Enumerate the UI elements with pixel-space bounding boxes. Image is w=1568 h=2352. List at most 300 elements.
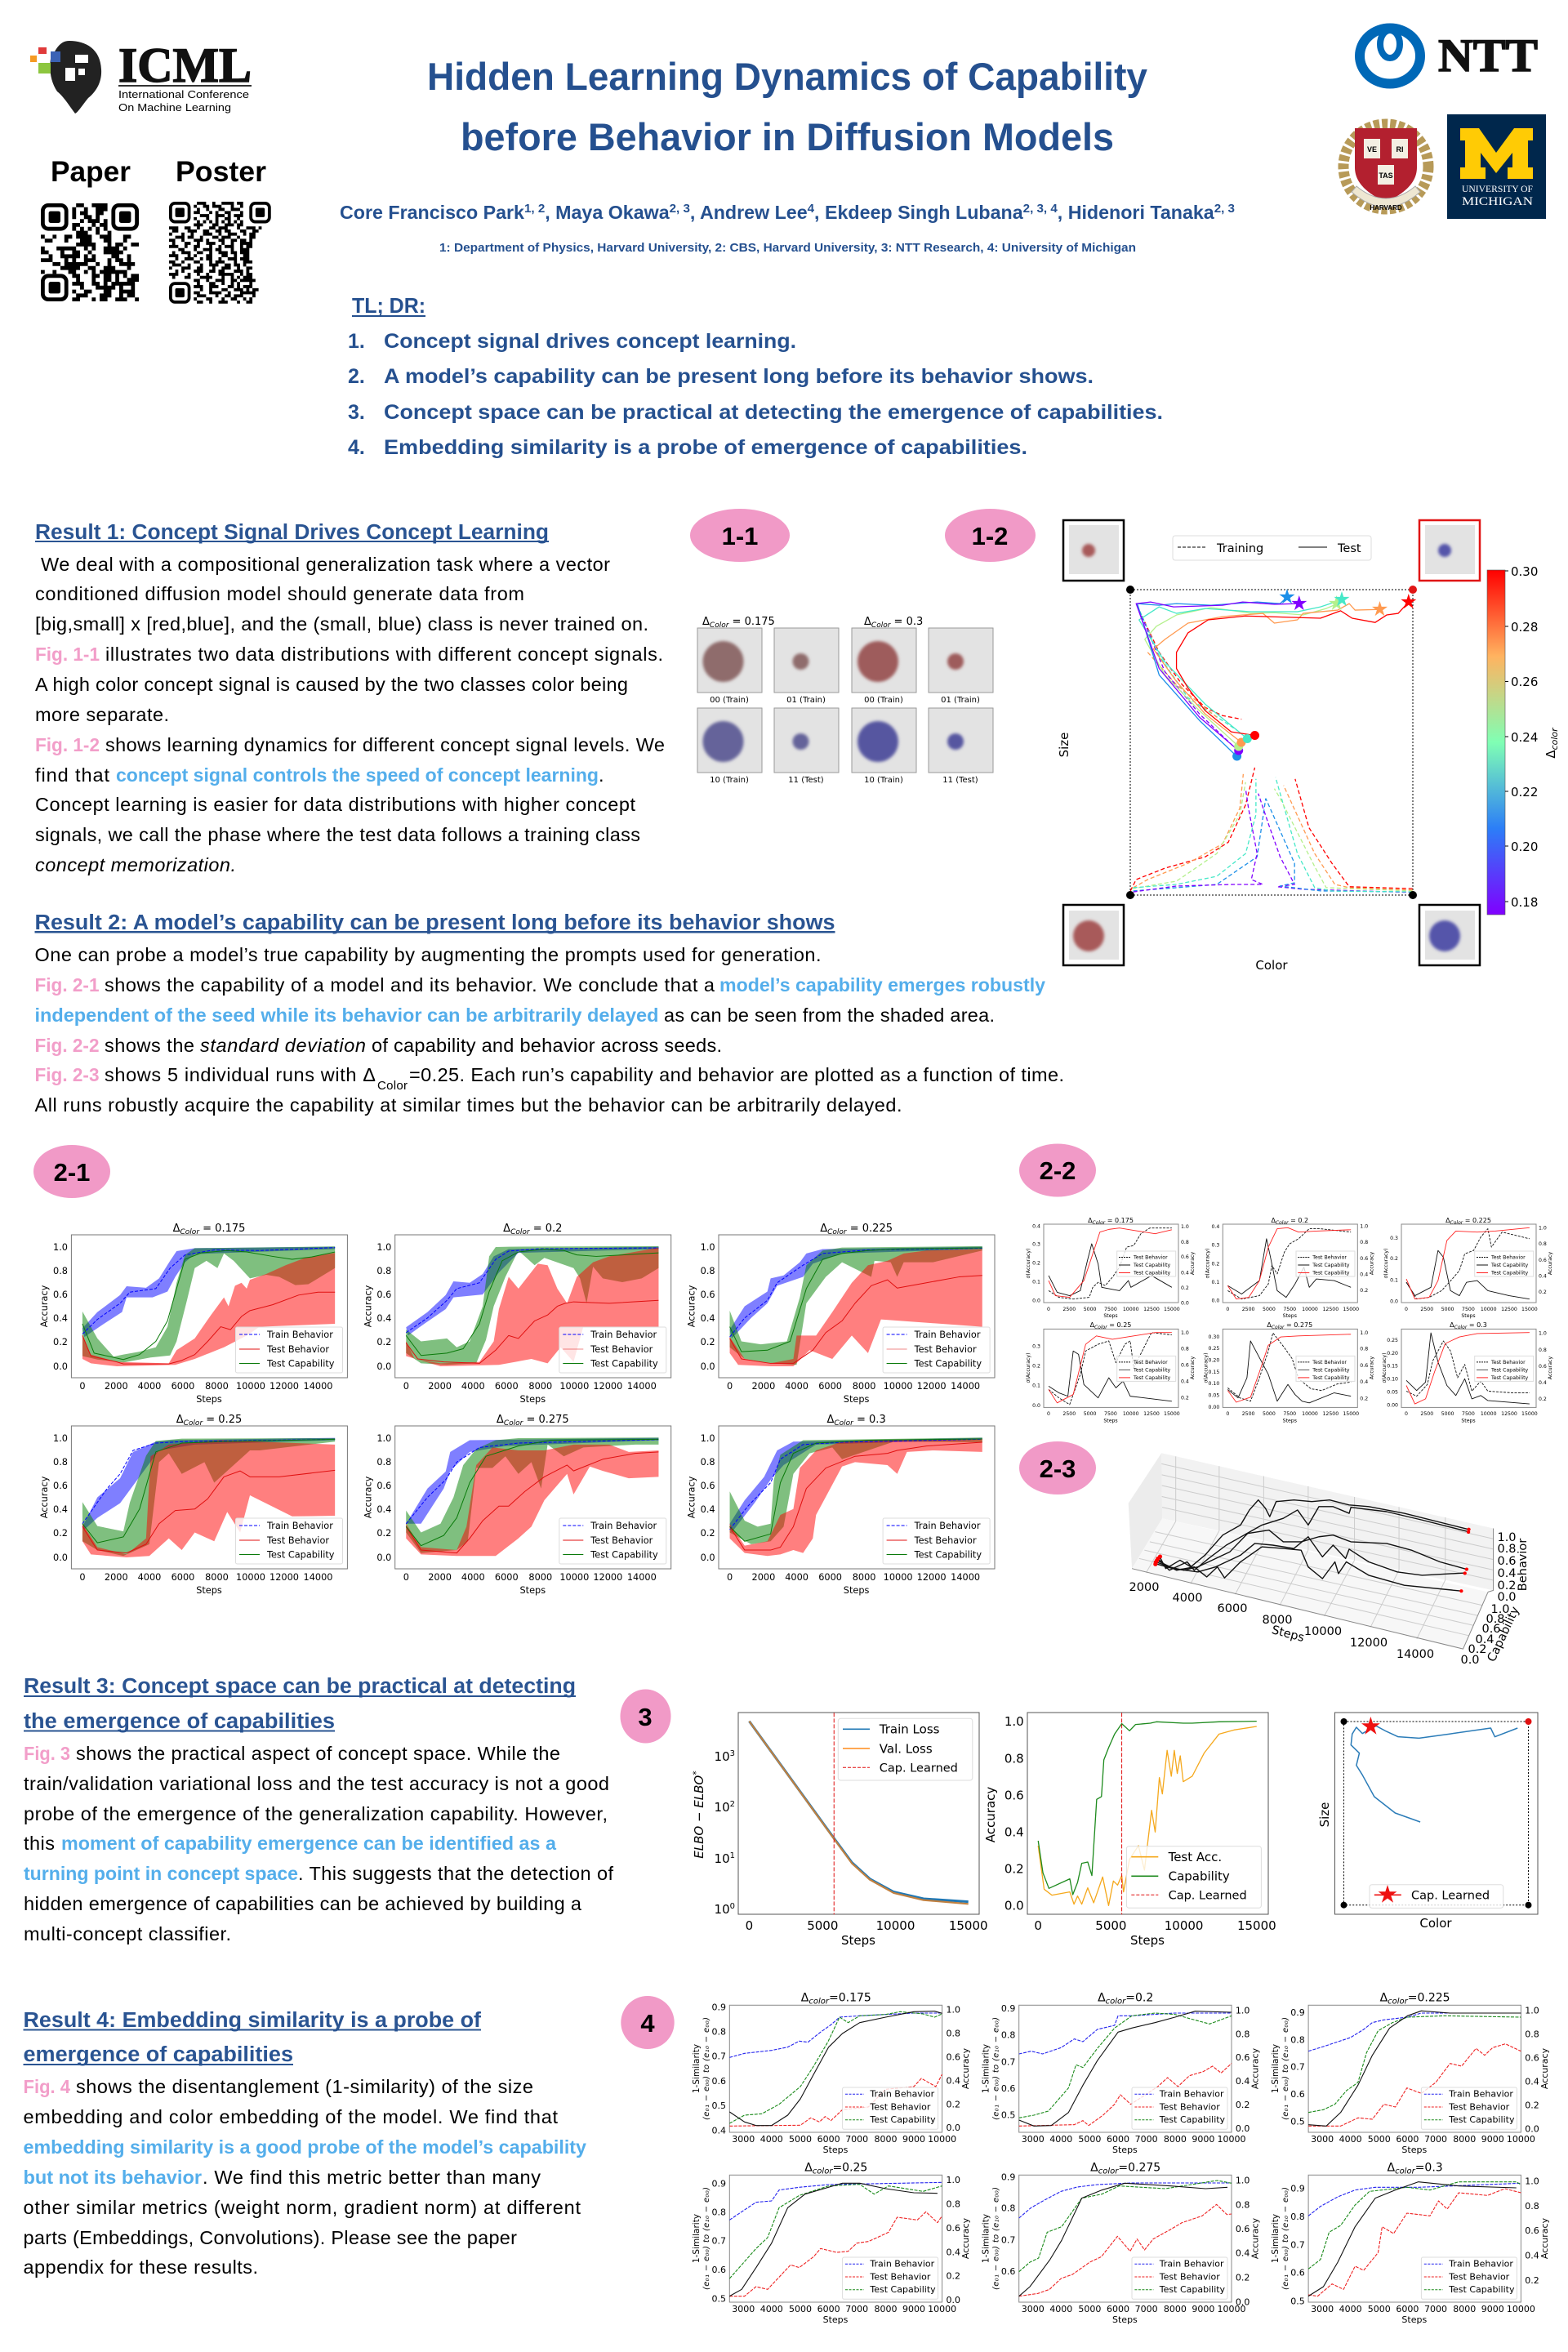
- figure 2-2: std chart 0.175: Δ: [1088, 1217, 1093, 1224]
- figure 3: accuracy chart: 0.4: [1004, 1824, 1024, 1839]
- figure 1-1: sample grids: 01 (Train): [941, 696, 980, 705]
- figure 2-1: accuracy chart 0.3: 0.0: [701, 1552, 715, 1563]
- figure 2-1: accuracy chart 0.175: [39, 1223, 347, 1405]
- figure 2-1: accuracy chart 0.2: 2000: [428, 1381, 452, 1392]
- figure 4: similarity chart 0.275: (e₀₁ − e₀₀) to (e₁₀ − e₀₀): [991, 2187, 1000, 2290]
- text: Result 3 body: [24, 1743, 613, 1944]
- figure 1-1: sample grids: Δ: [702, 616, 710, 628]
- figure 3: concept space chart: Size: [1317, 1802, 1332, 1827]
- figure 4: similarity chart 0.275: 0.4: [1236, 2248, 1250, 2259]
- colorbar: 0.26: [1511, 675, 1538, 689]
- figure 3: accuracy chart: Test Acc.: [1168, 1850, 1222, 1864]
- figure 2-1: accuracy chart 0.3: [687, 1414, 995, 1596]
- figure 4: similarity chart 0.275: 0.7: [1001, 2234, 1015, 2245]
- figure 2-1: accuracy chart 0.225: Color: [827, 1228, 848, 1236]
- figure 4: similarity chart 0.25: 0.6: [946, 2223, 960, 2234]
- figure 2-2: std chart 0.225: 15000: [1521, 1307, 1538, 1312]
- colorbar: color: [1549, 727, 1560, 750]
- figure 2-1: accuracy chart 0.175: 0.0: [53, 1361, 68, 1372]
- figure 4: similarity chart 0.175: Test Behavior: [869, 2101, 931, 2112]
- figure 4: similarity chart 0.3: 0.2: [1525, 2275, 1539, 2286]
- text: Result 1 body: A high color concept signal is caused by the two classes color being: [35, 674, 628, 695]
- figure 2-1: accuracy chart 0.3: = 0.3: [853, 1414, 886, 1426]
- figure 3: accuracy chart: Capability: [1169, 1869, 1230, 1884]
- figure 2-1: accuracy chart 0.275: [363, 1414, 671, 1596]
- figure 2-1: accuracy chart 0.275: Color: [504, 1419, 524, 1428]
- figure 3: ELBO loss chart: 2: [730, 1800, 735, 1809]
- figure 2-2: std chart 0.25: 0.6: [1181, 1362, 1189, 1368]
- figure 2-1: accuracy chart 0.2: 0.8: [376, 1266, 391, 1276]
- figure 4: similarity chart 0.25: Accuracy: [960, 2217, 971, 2259]
- figure 2-3: 3D trajectories: 0.8: [1486, 1613, 1505, 1626]
- figure 2-2: std chart 0.275: Test Capability: [1312, 1375, 1350, 1381]
- figure 2-2: std chart 0.2: 0.0: [1211, 1298, 1219, 1303]
- figure 2-2: std chart 0.2: σ(Accuracy): [1205, 1248, 1210, 1279]
- badge: 3: [621, 1689, 671, 1743]
- figure 2-2: std chart 0.175: 0.3: [1032, 1242, 1040, 1248]
- figure 1-2: concept space trajectories: [1057, 520, 1560, 973]
- figure 2-1: accuracy chart 0.275: 8000: [528, 1572, 552, 1583]
- text: Result 2 body: All runs robustly acquire the capability at similar times but the behavior can be arbitrarily delayed.: [34, 1094, 902, 1116]
- TL;DR block: Embedding similarity is a probe of emergence of capabilities.: [384, 436, 1027, 459]
- figure 3: accuracy chart: 10000: [1165, 1918, 1203, 1933]
- badge: 4: [621, 1996, 675, 2049]
- text: Result 1 body: signals, we call the phase where the test data follows a training class: [35, 824, 640, 845]
- figure 2-2: std chart 0.275: Test Behavior: [1312, 1360, 1347, 1365]
- figure 4: similarity chart 0.225: 0.4: [1525, 2077, 1539, 2087]
- figure 3: ELBO loss chart: 10: [715, 1851, 730, 1866]
- figure 2-1: accuracy chart 0.175: Color: [180, 1228, 200, 1236]
- figure 2-2: std chart 0.2: 0.4: [1360, 1272, 1368, 1277]
- figure 2-2: std chart 0.25: 0.2: [1032, 1364, 1040, 1369]
- figure 2-2: std chart 0.175: 0: [1047, 1307, 1050, 1312]
- figure 4: similarity chart 0.225: 9000: [1481, 2134, 1504, 2145]
- corner image: top left: [1063, 520, 1124, 581]
- figure 4: similarity chart 0.2: Test Behavior: [1159, 2101, 1220, 2112]
- figure 4: similarity chart 0.2: 0.8: [1001, 2030, 1015, 2041]
- figure 2-2: std chart 0.175: 2500: [1062, 1307, 1076, 1312]
- figure 2-3: 3D trajectories: 6000: [1218, 1602, 1247, 1615]
- badge: 2-1: 2-1: [54, 1158, 90, 1187]
- figure 4: similarity chart 0.3: 3000: [1311, 2304, 1334, 2314]
- figure 2-1: accuracy chart 0.275: 0.2: [376, 1528, 391, 1539]
- figure 3: accuracy chart: [983, 1713, 1276, 1948]
- figure 2-2: std chart 0.275: 0.00: [1209, 1405, 1219, 1410]
- figure 2-1: accuracy chart 0.25: 14000: [304, 1572, 332, 1583]
- figure 4: similarity chart 0.175: 0.2: [946, 2099, 960, 2109]
- figure 4: similarity chart 0.2: 7000: [1135, 2134, 1158, 2145]
- figure 4: similarity chart 0.2: [981, 1992, 1260, 2155]
- figure 2-1: accuracy chart 0.225: Train Behavior: [914, 1330, 981, 1340]
- figure 4: similarity chart 0.3: 10000: [1507, 2304, 1535, 2314]
- text: Result 4 body: [23, 2076, 586, 2278]
- figure 4: similarity chart 0.225: 1.0: [1525, 2006, 1539, 2016]
- text: Result 2 body: shows 5 individual runs with Δ: [105, 1064, 376, 1085]
- figure 2-2: std chart 0.2: 0.4: [1211, 1224, 1219, 1230]
- figure 2-2: std chart 0.225: 0.4: [1539, 1274, 1547, 1280]
- figure 2-1: accuracy chart 0.3: 12000: [917, 1572, 947, 1583]
- figure 4: similarity chart 0.2: 0.4: [1236, 2076, 1250, 2087]
- figure 2-2: std chart 0.225: σ(Accuracy): [1383, 1248, 1389, 1279]
- figure 4: similarity chart 0.175: 8000: [874, 2134, 897, 2145]
- figure 2-2: std chart 0.25: Steps: [1103, 1418, 1118, 1424]
- text: Result 2 body: [34, 944, 1064, 1116]
- figure 2-3: 3D trajectories: 12000: [1350, 1637, 1388, 1650]
- figure 4: similarity chart 0.25: =0.25: [832, 2162, 867, 2175]
- figure 2-2: std chart 0.3: 0.8: [1539, 1348, 1547, 1353]
- figure 4: similarity chart 0.2: 0.7: [1001, 2056, 1015, 2067]
- figure 1-1: sample grids: Δ: [864, 616, 871, 628]
- figure 2-2: std chart 0.25: 0.2: [1181, 1395, 1189, 1401]
- figure 4: similarity chart 0.2: 0.9: [1001, 2003, 1015, 2014]
- figure 2-2: std chart 0.225: Δ: [1446, 1217, 1450, 1224]
- figure 1-1: sample grids: = 0.3: [890, 616, 923, 628]
- legend: [1173, 536, 1371, 560]
- figure 2-2: std chart 0.3: 1.0: [1539, 1331, 1547, 1337]
- figure 2-2: std chart 0.275: σ(Accuracy): [1203, 1352, 1209, 1383]
- figure 2-2: std chart 0.3: σ(Accuracy): [1382, 1352, 1388, 1383]
- figure 2-2: std chart 0.2: [1205, 1217, 1374, 1319]
- figure 2-2: std chart 0.3: Test Capability: [1490, 1367, 1528, 1373]
- figure 2-1: accuracy chart 0.3: 6000: [818, 1572, 842, 1583]
- figure 2-2: std chart 0.25: 2500: [1062, 1411, 1076, 1417]
- figure 4: similarity chart 0.175: color: [808, 1998, 830, 2007]
- figure 2-3: 3D trajectories: 10000: [1304, 1625, 1342, 1638]
- figure 3: ELBO loss chart: 10: [715, 1902, 730, 1917]
- figure 2-1: accuracy chart 0.3: Δ: [826, 1414, 834, 1426]
- figure 2-2: std chart 0.25: [1026, 1321, 1196, 1424]
- figure 2-3: 3D trajectories: Behavior: [1517, 1539, 1530, 1591]
- figure 2-1: accuracy chart 0.175: 10000: [236, 1381, 265, 1392]
- figure 2-2: std chart 0.25: Δ: [1090, 1321, 1094, 1329]
- figure 4: similarity chart 0.175: 0.5: [712, 2100, 726, 2111]
- figure 4: similarity chart 0.175: 4000: [760, 2134, 783, 2145]
- figure 4: similarity chart 0.25: color: [813, 2167, 833, 2176]
- text: Result 2 body: independent of the seed while its behavior can be arbitrarily delayed: [34, 1004, 658, 1026]
- figure 2-2: std chart 0.225: 10000: [1481, 1307, 1497, 1312]
- figure 3: ELBO loss chart: Cap. Learned: [880, 1762, 958, 1775]
- logo: ICML: [30, 38, 252, 114]
- figure 4: similarity chart 0.25: 0.4: [946, 2247, 960, 2257]
- figure 4: similarity chart 0.3: 1-Similarity: [1271, 2214, 1281, 2263]
- figure 4: similarity chart 0.225: 6000: [1396, 2134, 1419, 2145]
- logo: ICML: On Machine Learning: [118, 102, 231, 114]
- figure 2-2: std chart 0.2: 0: [1226, 1307, 1229, 1312]
- figure 2-1: accuracy chart 0.25: 0.6: [53, 1481, 68, 1491]
- figure 4: similarity chart 0.225: 0.8: [1290, 2034, 1305, 2045]
- colorbar: Δ: [1544, 750, 1558, 759]
- figure 2-1: accuracy chart 0.3: Accuracy: [687, 1476, 697, 1518]
- figure 2-1: accuracy chart 0.175: = 0.175: [199, 1223, 245, 1235]
- figure 4: similarity chart 0.275: 0.8: [1236, 2199, 1250, 2210]
- text: Result 1 body: [35, 554, 665, 875]
- figure 2-2: std chart 0.175: Color: [1093, 1220, 1106, 1226]
- figure 2-1: accuracy chart 0.2: Color: [510, 1228, 531, 1236]
- figure 2-3: 3D trajectories: 0.2: [1497, 1579, 1517, 1592]
- legend: Training: [1216, 542, 1263, 555]
- figure 1-1: sample grids: 01 (Train): [786, 696, 826, 705]
- figure 4: similarity chart 0.25: 5000: [789, 2304, 812, 2314]
- figure 4: similarity chart 0.175: Test Capability: [869, 2114, 936, 2125]
- figure 4: similarity chart 0.225: (e₀₁ − e₀₀) to (e₁₀ − e₀₀): [1281, 2017, 1290, 2120]
- logo: NTT: NTT: [1438, 30, 1538, 82]
- figure 2-2: std chart 0.225: 0.0: [1390, 1298, 1398, 1304]
- authors: , Andrew Lee: [690, 202, 808, 223]
- text: Result 1 body: concept signal controls the speed of concept learning: [116, 764, 599, 786]
- figure 4: similarity chart 0.25: Test Capability: [869, 2284, 936, 2295]
- colorbar: 0.30: [1511, 564, 1538, 579]
- figure 2-2: std chart 0.3: 0.2: [1539, 1396, 1547, 1402]
- figure 2-2: std chart 0.3: [1382, 1321, 1553, 1424]
- figure 2-2: std chart 0.2: Test Capability: [1312, 1263, 1350, 1268]
- authors: Core Francisco Park: [340, 202, 523, 223]
- plot frame: [1130, 590, 1413, 895]
- TL;DR block: Concept signal drives concept learning.: [384, 330, 796, 353]
- text: Result 3 body: Fig. 3: [24, 1743, 70, 1764]
- figure 2-1: accuracy chart 0.175: 2000: [105, 1381, 128, 1392]
- figure 2-1: accuracy chart 0.3: 0: [727, 1572, 733, 1583]
- figure 4: similarity chart 0.2: 1.0: [1236, 2005, 1250, 2016]
- figure 2-3: 3D trajectories: 4000: [1173, 1592, 1202, 1605]
- figure 2-2: std chart 0.2: 7500: [1283, 1307, 1296, 1312]
- figure 4: similarity chart 0.275: 6000: [1107, 2304, 1129, 2314]
- figure 2-2: std chart 0.175: 0.4: [1181, 1271, 1189, 1276]
- figure 4: similarity chart 0.25: 8000: [874, 2304, 897, 2314]
- figure 2-2: std chart 0.25: 0.1: [1032, 1383, 1040, 1389]
- text: Result 2 body: Color: [377, 1079, 408, 1093]
- figure 4: similarity chart 0.2: 0.6: [1001, 2083, 1015, 2094]
- figure 2-1: accuracy chart 0.25: Δ: [176, 1414, 184, 1426]
- text: Result 3 body: turning point in concept space: [24, 1863, 298, 1884]
- figure 2-1: accuracy chart 0.225: Steps: [844, 1394, 870, 1405]
- figure 2-1: accuracy chart 0.2: [363, 1223, 671, 1405]
- figure 2-1: accuracy chart 0.25: 0.8: [53, 1457, 68, 1468]
- figure 3: ELBO loss chart: 1: [730, 1851, 735, 1860]
- figure 2-1: accuracy chart 0.25: 0.2: [53, 1528, 68, 1539]
- figure 3: ELBO loss chart: 0: [730, 1902, 735, 1911]
- figure 2-2: std chart 0.25: Test Capability: [1133, 1375, 1170, 1381]
- figure 3: ELBO loss chart: *: [691, 1771, 702, 1775]
- badge: 2-3: [1019, 1441, 1096, 1494]
- figure 2-2: std chart 0.3: = 0.3: [1467, 1321, 1487, 1329]
- figure 3: ELBO loss chart: Steps: [841, 1933, 875, 1948]
- figure 2-1: accuracy chart 0.275: Steps: [519, 1585, 546, 1596]
- figure 2-1: accuracy chart 0.2: Test Capability: [590, 1359, 658, 1369]
- figure 4: similarity chart 0.3: =0.3: [1415, 2162, 1443, 2175]
- figure 4: similarity chart 0.275: 0.2: [1236, 2272, 1250, 2283]
- axis labels: Color: [1255, 958, 1288, 973]
- figure 2-1: accuracy chart 0.3: 8000: [853, 1572, 875, 1583]
- figure 4: similarity chart 0.225: 1-Similarity: [1271, 2044, 1281, 2093]
- colorbar: 0.20: [1511, 840, 1538, 854]
- figure 2-1: accuracy chart 0.275: 0: [403, 1572, 409, 1583]
- figure 2-2: std chart 0.275: 0.2: [1360, 1396, 1368, 1401]
- figure 2-1: accuracy chart 0.175: 6000: [172, 1381, 194, 1392]
- figure 2-2: std chart 0.225: Color: [1450, 1220, 1463, 1226]
- figure 1-1: sample grids: 10 (Train): [864, 776, 903, 785]
- figure 4: similarity chart 0.275: 1-Similarity: [981, 2214, 991, 2263]
- figure 2-3: 3D trajectories: 0.8: [1497, 1543, 1517, 1556]
- figure 2-2: std chart 0.3: 0.05: [1387, 1390, 1398, 1395]
- figure 2-2: std chart 0.175: [1026, 1217, 1196, 1319]
- figure 2-1: accuracy chart 0.2: 4000: [461, 1381, 485, 1392]
- figure 3: accuracy chart: 5000: [1095, 1918, 1126, 1933]
- figure 2-2: std chart 0.3: 0: [1405, 1411, 1408, 1417]
- figure 2-1: accuracy chart 0.175: Accuracy: [39, 1285, 50, 1327]
- text: Result 4 body: . We find this metric better than many: [203, 2167, 541, 2188]
- figure 2-1: accuracy chart 0.2: Train Behavior: [590, 1330, 657, 1340]
- figure 4: similarity chart 0.25: Δ: [804, 2162, 813, 2175]
- heading: Result 1: Result 1: Concept Signal Drives Concept Learning: [35, 521, 549, 544]
- QR code: paper: [41, 205, 139, 300]
- figure 3: accuracy chart: 0: [1034, 1918, 1042, 1933]
- figure 2-1: accuracy chart 0.175: Test Capability: [266, 1359, 335, 1369]
- figure 2-2: std chart 0.175: 5000: [1084, 1307, 1097, 1312]
- figure 2-1: accuracy chart 0.225: 0.6: [701, 1290, 715, 1300]
- figure 4: similarity chart 0.3: 7000: [1424, 2304, 1447, 2314]
- figure 2-2: std chart 0.2: 5000: [1263, 1307, 1276, 1312]
- figure 4: similarity chart 0.175: Accuracy: [960, 2047, 971, 2089]
- figure 2-2: std chart 0.225: Test Behavior: [1490, 1254, 1526, 1261]
- figure 4: similarity chart 0.3: color: [1395, 2167, 1416, 2176]
- figure 4: similarity chart 0.225: 0.2: [1525, 2100, 1539, 2111]
- figure 2-2: std chart 0.3: Δ: [1450, 1321, 1454, 1329]
- figure 2-1: accuracy chart 0.225: 10000: [884, 1381, 913, 1392]
- figure 4: similarity chart 0.175: 1.0: [946, 2005, 960, 2016]
- figure 2-1: accuracy chart 0.2: 0.6: [376, 1290, 391, 1300]
- text: Result 2 body: Fig. 2-2: [34, 1035, 100, 1056]
- figure 2-1: accuracy chart 0.275: 10000: [559, 1572, 589, 1583]
- figure 4: similarity chart 0.175: 10000: [928, 2134, 956, 2145]
- figure 2-1: accuracy chart 0.3: Color: [834, 1419, 854, 1428]
- text: Result 4 body: embedding and color embedding of the model. We find that: [23, 2106, 558, 2127]
- figure 4: similarity chart 0.25: 7000: [845, 2304, 868, 2314]
- text: Result 2 body: Fig. 2-3: [34, 1064, 100, 1085]
- text: Result 2 body: shows the: [105, 1035, 194, 1056]
- text: Result 1 body: find that: [35, 764, 109, 786]
- logo: NTT: [1360, 28, 1538, 83]
- figure 4: similarity chart 0.3: Test Capability: [1448, 2284, 1515, 2295]
- figure 2-1: accuracy chart 0.175: 1.0: [53, 1242, 68, 1253]
- figure 4: similarity chart 0.225: 0.8: [1525, 2029, 1539, 2040]
- text: Result 1 body: Fig. 1-2: [35, 734, 100, 755]
- figure 2-1: accuracy chart 0.175: 12000: [270, 1381, 299, 1392]
- affiliations: 1: Department of Physics, Harvard University, 2: CBS, Harvard University, 3: NTT Research, 4: University of Michigan: [439, 241, 1136, 255]
- figure 4: similarity chart 0.225: 0.5: [1290, 2117, 1305, 2127]
- figure 2-1: accuracy chart 0.25: 8000: [205, 1572, 229, 1583]
- figure 2-2: std chart 0.175: 1.0: [1181, 1224, 1189, 1230]
- figure 2-2: std chart 0.175: σ(Accuracy): [1026, 1248, 1031, 1279]
- figure 2-2: std chart 0.275: 2500: [1242, 1411, 1255, 1417]
- corner image: top right: [1419, 520, 1480, 581]
- figure 2-1: accuracy chart 0.2: Test Behavior: [590, 1344, 653, 1355]
- figure 3: ELBO loss chart: 0: [746, 1918, 753, 1933]
- figure 2-2: std chart 0.25: Accuracy: [1190, 1356, 1196, 1379]
- figure 2-1: accuracy chart 0.175: Train Behavior: [266, 1330, 333, 1340]
- authors: 2, 3: [670, 202, 690, 216]
- figure 4: similarity chart 0.275: 0.6: [1001, 2266, 1015, 2277]
- figure 4: similarity chart 0.275: [981, 2162, 1260, 2325]
- figure 2-3: 3D trajectories: 14000: [1396, 1648, 1434, 1661]
- colorbar: [1487, 564, 1560, 915]
- text: Result 3 body: probe of the emergence of the generalization capability. However,: [24, 1803, 608, 1824]
- figure 4: similarity chart 0.225: Accuracy: [1539, 2047, 1550, 2089]
- figure 4: similarity chart 0.175: 0.6: [712, 2076, 726, 2087]
- figure 4: similarity chart 0.25: 0.5: [712, 2293, 726, 2304]
- figure 2-2: std chart 0.3: 0.15: [1387, 1364, 1398, 1369]
- figure 2-3: 3D trajectories: 0.2: [1468, 1643, 1487, 1656]
- figure 1-1: sample grids: Color: [871, 621, 892, 630]
- text: Result 2 body: shows the capability of a model and its behavior. We conclude that a: [105, 974, 715, 996]
- figure 2-1: accuracy chart 0.3: Train Behavior: [914, 1521, 981, 1531]
- figure 4: similarity chart 0.2: 9000: [1192, 2134, 1214, 2145]
- figure 4: similarity chart 0.225: 5000: [1368, 2134, 1391, 2145]
- logo: Michigan: MICHIGAN: [1462, 195, 1533, 208]
- figure 4: similarity chart 0.225: Test Behavior: [1448, 2101, 1510, 2112]
- logo: Harvard: VE: [1367, 145, 1377, 154]
- figure 2-1: accuracy chart 0.275: Δ: [497, 1414, 504, 1426]
- figure 2-3: 3D trajectories: 0.6: [1481, 1623, 1501, 1636]
- heading: Result 4: emergence of capabilities: [23, 2043, 293, 2066]
- figure 2-1: accuracy chart 0.225: 0.0: [701, 1361, 715, 1372]
- badge: 1-1: 1-1: [722, 522, 758, 550]
- figure 2-2: std chart 0.3: 10000: [1481, 1411, 1497, 1417]
- text: Result 3 body: . This suggests that the detection of: [298, 1863, 613, 1884]
- figure 2-1: accuracy chart 0.25: Test Capability: [266, 1550, 335, 1560]
- figure 4: similarity chart 0.2: Accuracy: [1250, 2047, 1260, 2089]
- figure 3: ELBO loss chart: 10: [715, 1800, 730, 1815]
- figure 2-2: std chart 0.175: Accuracy: [1190, 1252, 1196, 1275]
- figure 2-2: std chart 0.225: 12500: [1501, 1307, 1517, 1312]
- text: Result 1 body: illustrates two data distributions with different concept signals.: [105, 644, 663, 665]
- figure 4: similarity chart 0.225: 4000: [1339, 2134, 1362, 2145]
- figure 2-2: std chart 0.3: 2500: [1420, 1411, 1433, 1417]
- logo: Michigan: [1447, 114, 1546, 219]
- figure 4: similarity chart 0.275: 1.0: [1236, 2175, 1250, 2185]
- figure 4: similarity chart 0.275: 7000: [1135, 2304, 1158, 2314]
- figure 4: similarity chart 0.275: Accuracy: [1250, 2217, 1260, 2259]
- figure 3: ELBO loss chart: 3: [730, 1749, 735, 1758]
- figure 4: similarity chart 0.3: 4000: [1339, 2304, 1362, 2314]
- text: Result 1 body: [big,small] x [red,blue], and the (small, blue) class is never trained on.: [35, 613, 648, 635]
- figure 2-1: accuracy chart 0.2: 8000: [528, 1381, 552, 1392]
- figure 2-2: std chart 0.3: Test Capability: [1490, 1375, 1528, 1381]
- figure 2-2: std chart 0.2: 0.6: [1360, 1256, 1368, 1262]
- figure 2-2: std chart 0.275: 0.20: [1209, 1357, 1219, 1364]
- figure 2-2: std chart 0.225: 0.1: [1390, 1277, 1398, 1284]
- figure 2-2: std chart 0.25: 7500: [1104, 1411, 1117, 1417]
- figure 4: similarity chart 0.175: 0.7: [712, 2051, 726, 2062]
- figure 2-1: accuracy chart 0.225: 0.4: [701, 1313, 715, 1324]
- figure 4: similarity chart 0.275: 0.6: [1236, 2224, 1250, 2234]
- figure 2-1: accuracy chart 0.225: 12000: [917, 1381, 947, 1392]
- figure 2-2: std chart 0.3: 0.6: [1539, 1364, 1547, 1370]
- figure 4: similarity chart 0.25: 1-Similarity: [692, 2214, 702, 2263]
- text: Result 2 body: =0.25. Each run’s capability and behavior are plotted as a function of time.: [409, 1064, 1064, 1085]
- text: Result 4 body: parts (Embeddings, Convolutions). Please see the paper: [23, 2227, 517, 2248]
- axis labels: [1057, 733, 1288, 973]
- figure 2-2: std chart 0.3: Steps: [1461, 1418, 1476, 1424]
- figure 2-2: std chart 0.175: 0.8: [1181, 1240, 1189, 1245]
- figure 4: similarity chart 0.25: 0.8: [946, 2199, 960, 2210]
- figure 2-2: std chart 0.2: 0.3: [1211, 1242, 1219, 1248]
- figure 4: similarity chart 0.25: 9000: [902, 2304, 925, 2314]
- figure 2-2: std chart 0.225: [1383, 1217, 1553, 1319]
- figure 2-2: std chart 0.225: Test Capability: [1490, 1263, 1528, 1268]
- text: Result 1 body: concept memorization.: [35, 854, 236, 875]
- corner image: bottom left: [1063, 905, 1124, 965]
- logo: ICML: International Conference: [118, 89, 249, 100]
